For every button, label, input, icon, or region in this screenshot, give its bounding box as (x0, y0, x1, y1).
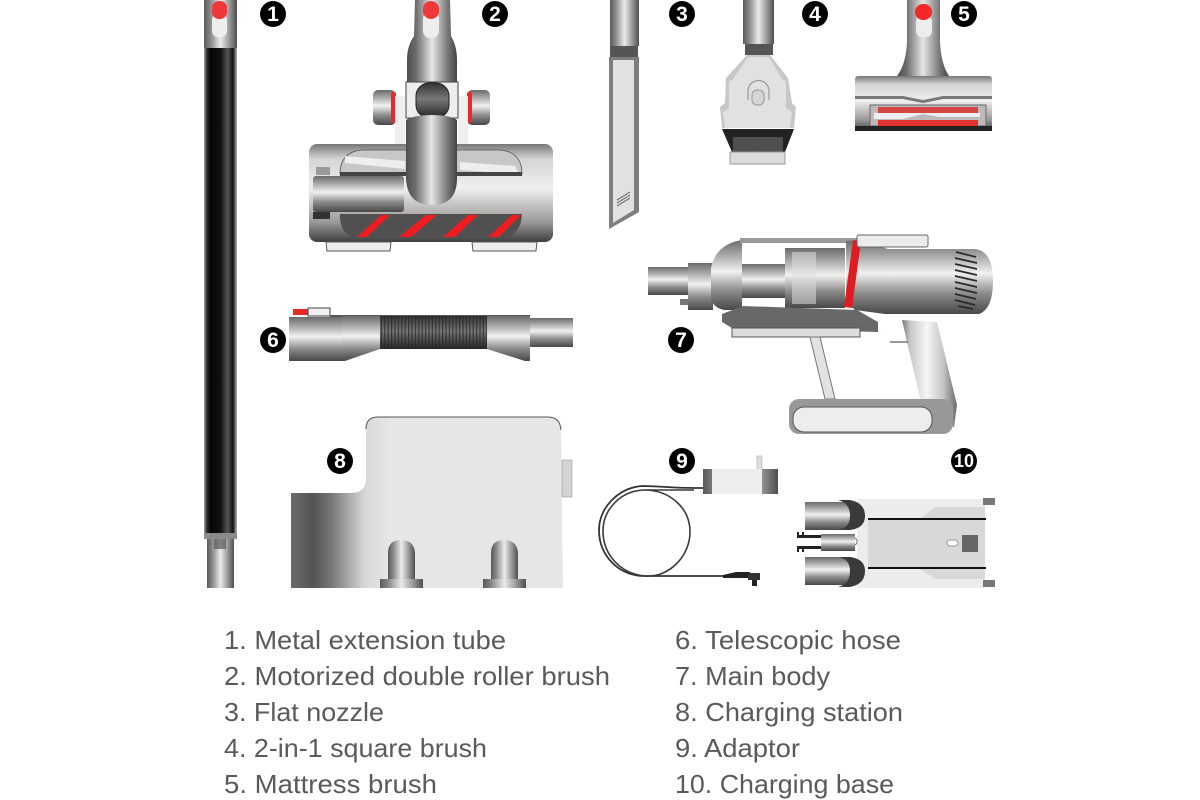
legend: right column: 10. Charging base (675, 769, 894, 799)
brush head housing (309, 144, 553, 242)
part 7: main body (648, 235, 993, 434)
number badge 6: 6 (267, 329, 279, 352)
part 4: 2-in-1 square brush (720, 0, 796, 164)
upper roller window (340, 150, 522, 174)
upper charging prong (805, 502, 865, 530)
number badge 1 (260, 1, 286, 27)
tube release button (212, 1, 227, 19)
number badge 3 (669, 1, 695, 27)
legend: left column: 2. Motorized double roller brush (224, 661, 610, 691)
front bulb (711, 240, 742, 310)
coiled cable (599, 486, 723, 576)
bottom grip plate (722, 306, 878, 332)
flexible joint (406, 82, 458, 118)
number badge 5: 5 (958, 3, 970, 26)
legend: right column: 7. Main body (675, 661, 830, 691)
corner tabs (983, 498, 995, 587)
number badge 10 (951, 448, 977, 474)
number badge 2: 2 (489, 3, 501, 26)
number badge 9: 9 (676, 450, 688, 473)
nozzle grip lines (617, 192, 630, 206)
front tube (648, 267, 689, 295)
red roller window (870, 105, 986, 126)
part 10: charging base (797, 498, 995, 588)
number badge 1: 1 (267, 3, 279, 26)
legend: left column: 3. Flat nozzle (224, 697, 384, 727)
number badge 5 (951, 1, 977, 27)
part 3: flat nozzle (609, 0, 639, 229)
part 5: mattress brush (855, 0, 992, 131)
mounting holes (848, 538, 857, 545)
motor housing (846, 240, 993, 314)
red band (844, 240, 861, 308)
part 8: charging station (291, 417, 572, 588)
neck (407, 0, 457, 90)
base plate (857, 499, 985, 588)
legend: left column: 1. Metal extension tube (224, 625, 506, 655)
angled connector (723, 572, 760, 586)
part 6: telescopic hose (289, 308, 573, 361)
number badge 9 (669, 448, 695, 474)
brush emblem (748, 80, 769, 100)
front strut (810, 337, 835, 399)
station side tab (562, 460, 572, 497)
number badge 2 (482, 1, 508, 27)
charging pin left (380, 540, 423, 588)
part 2: motorized double roller brush (309, 0, 553, 251)
battery base (789, 399, 953, 434)
corrugated hose (380, 316, 487, 349)
handle (902, 320, 957, 427)
exhaust vents (955, 252, 977, 309)
number badge 4 (802, 1, 828, 27)
hose latch (293, 308, 330, 316)
legend: right column: 9. Adaptor (675, 733, 800, 763)
number badge 6 (260, 327, 286, 353)
charging pin right (483, 540, 526, 588)
legend: left column: 5. Mattress brush (224, 769, 437, 799)
elbow (406, 115, 457, 205)
legend: left column (224, 625, 610, 799)
number badge 4: 4 (809, 3, 821, 26)
side cylinder (313, 176, 404, 212)
lower roller with red stripes (340, 214, 522, 239)
number badge 7 (668, 327, 694, 353)
legend: left column: 4. 2-in-1 square brush (224, 733, 487, 763)
brush feet (326, 242, 537, 251)
part 1: metal extension tube (204, 0, 237, 588)
number badge 3: 3 (676, 3, 688, 26)
bristles (722, 129, 794, 152)
side wheels (373, 90, 490, 125)
filter cylinder (785, 248, 845, 308)
inner tube (742, 264, 786, 298)
legend: right column: 6. Telescopic hose (675, 625, 901, 655)
number badge 10: 10 (954, 451, 974, 471)
clear bin frame (740, 238, 860, 243)
number badge 7: 7 (675, 329, 687, 352)
number badge 8: 8 (334, 450, 346, 473)
lower charging prong (805, 557, 865, 585)
part 9: adaptor (599, 456, 778, 586)
legend: right column: 8. Charging station (675, 697, 903, 727)
contacts (797, 535, 827, 549)
number badge 8 (327, 448, 353, 474)
legend: right column (675, 625, 903, 799)
